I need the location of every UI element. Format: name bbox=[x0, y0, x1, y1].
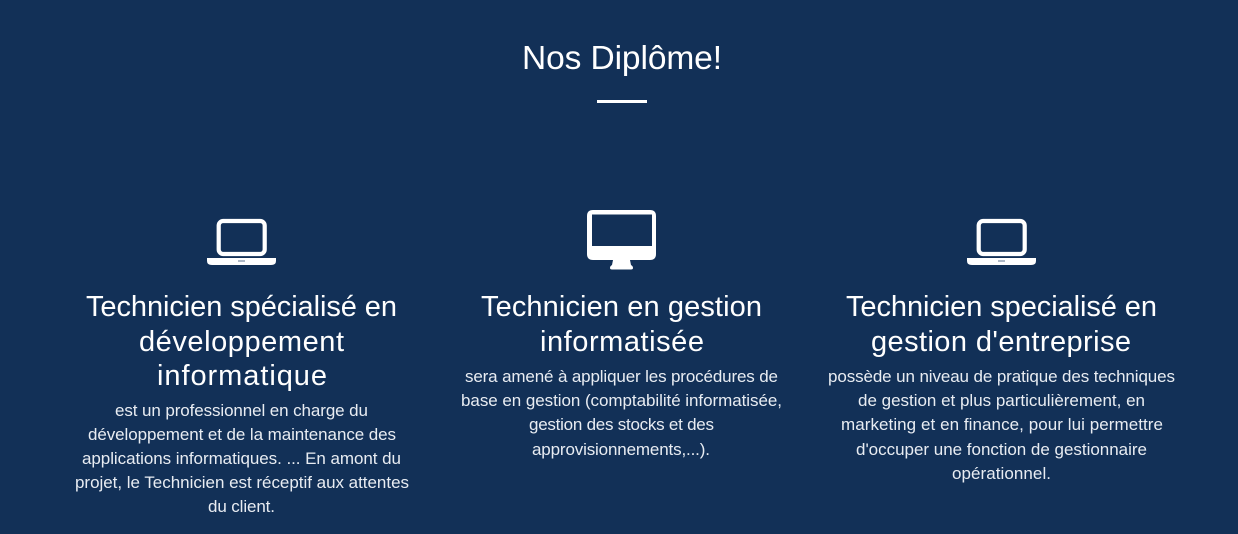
heading bbox=[481, 291, 762, 358]
panel: gestion informatisée bbox=[461, 210, 782, 459]
text block: gestion des stocks et des bbox=[529, 415, 714, 434]
heading: Technicien spécialisé en bbox=[86, 291, 397, 323]
text block: de gestion et plus particulièrement, en bbox=[858, 391, 1145, 410]
text block: du client. bbox=[208, 497, 275, 516]
heading: gestion d'entreprise bbox=[871, 326, 1131, 358]
text block: d'occuper une fonction de gestionnaire bbox=[856, 440, 1147, 459]
text block: projet, le Technicien est réceptif aux attentes bbox=[75, 473, 409, 492]
heading: informatique bbox=[157, 360, 327, 392]
heading: Technicien en gestion bbox=[481, 291, 762, 323]
title underline bbox=[597, 100, 647, 103]
text block: est un professionnel en charge du bbox=[115, 401, 368, 420]
text block bbox=[828, 367, 1175, 483]
text block: marketing et en finance, pour lui permettre bbox=[841, 415, 1163, 434]
icon: laptop bbox=[207, 221, 276, 265]
icon: desktop monitor bbox=[587, 210, 656, 270]
heading: Technicien specialisé en bbox=[846, 291, 1157, 323]
text block: approvisionnements,...). bbox=[532, 440, 710, 459]
heading: développement bbox=[139, 326, 344, 358]
heading bbox=[846, 291, 1157, 358]
text block: opérationnel. bbox=[952, 464, 1051, 483]
text block: applications informatiques. ... En amont du bbox=[82, 449, 401, 468]
heading: informatisée bbox=[540, 326, 704, 358]
title: Nos Diplôme! bbox=[522, 40, 722, 77]
panel: développement informatique bbox=[75, 221, 409, 516]
text block bbox=[75, 401, 409, 516]
text block: base en gestion (comptabilité informatisée, bbox=[461, 391, 782, 410]
text block bbox=[461, 367, 782, 459]
icon: laptop bbox=[967, 221, 1036, 265]
heading bbox=[86, 291, 397, 392]
text block: développement et de la maintenance des bbox=[88, 425, 396, 444]
text block: sera amené à appliquer les procédures de bbox=[465, 367, 778, 386]
text block: possède un niveau de pratique des techniques bbox=[828, 367, 1175, 386]
panel: gestion d'entreprise bbox=[828, 221, 1175, 483]
